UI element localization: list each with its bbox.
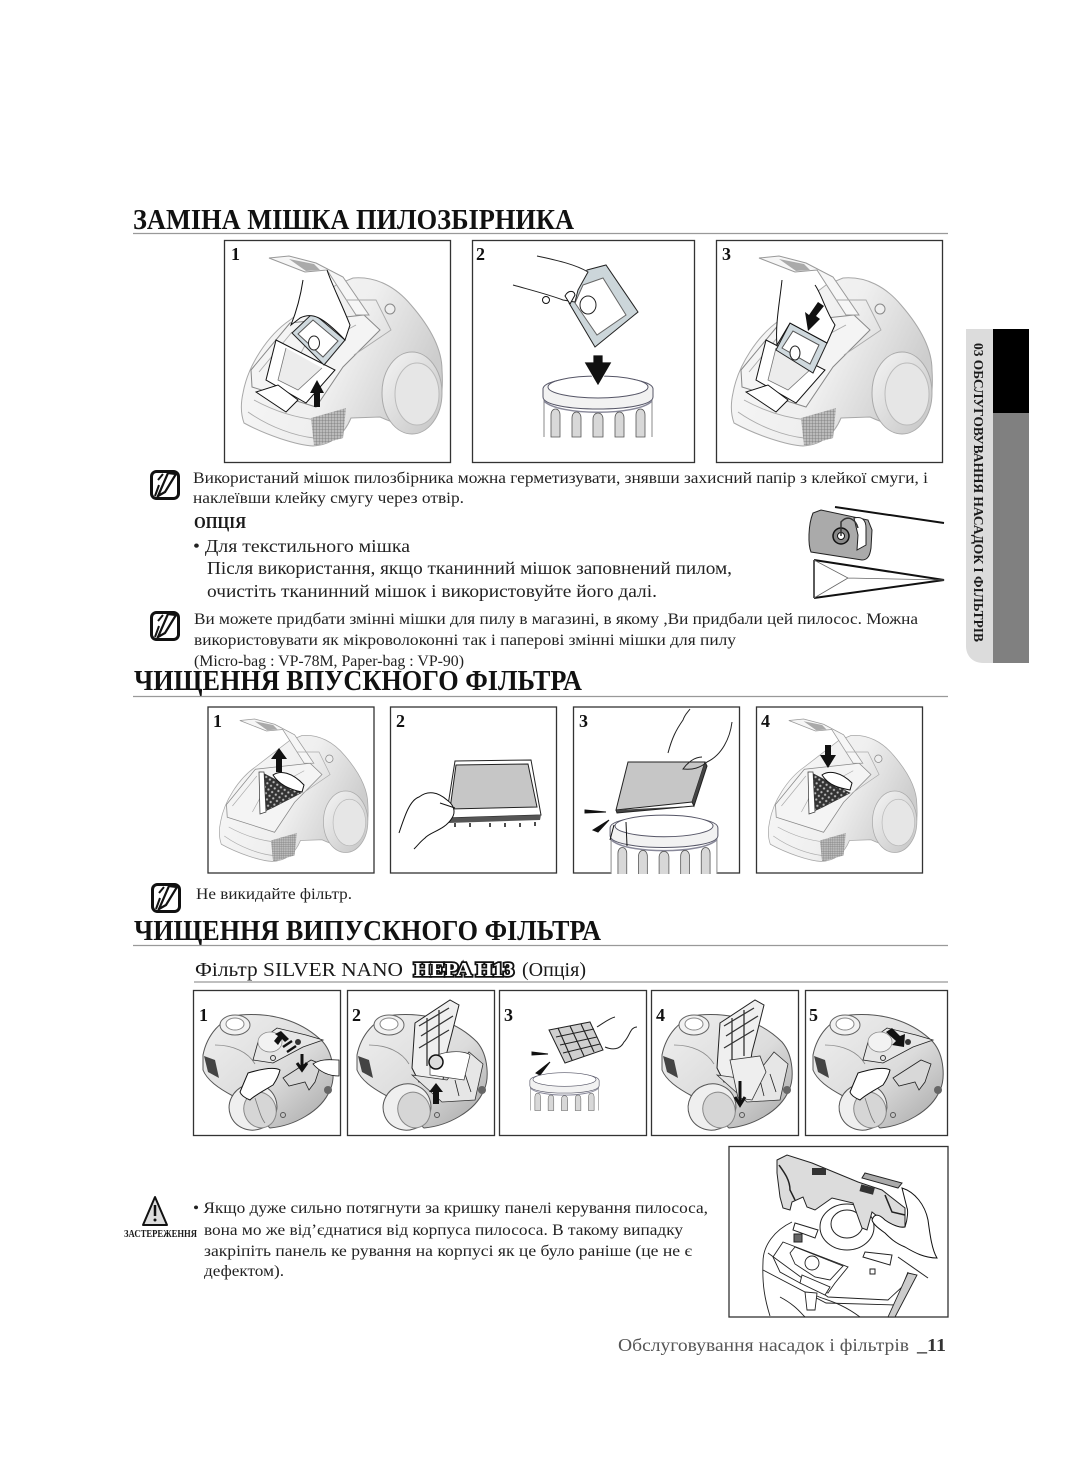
hand on cover xyxy=(872,1188,937,1258)
sidebar: chapter tab xyxy=(966,329,1029,663)
panel: outlet filter step 3 xyxy=(500,990,646,1136)
panel: outlet filter step 4: 4 xyxy=(656,1005,665,1025)
option block: • Для текстильного мішка xyxy=(193,536,410,556)
panel: inlet filter step 2: 2 xyxy=(396,711,405,731)
footer: page number: _11 xyxy=(916,1335,946,1355)
note: sealing the used bag: Використаний мішок пилозбірника можна герметизувати, знявши захисний папір з клейкої смуги, і xyxy=(193,470,929,487)
caution: control panel cover: вона мо же від’єднатися від корпуса пилососа. В такому випадку xyxy=(204,1222,683,1239)
grey cover xyxy=(777,1155,905,1230)
icon: textile bag xyxy=(809,507,944,598)
panel: inlet filter step 3 xyxy=(574,707,740,904)
heading: outlet filter cleaning: ЧИЩЕННЯ ВИПУСКНОГО ФІЛЬТРА xyxy=(134,916,602,947)
icon: note pencil xyxy=(152,472,178,498)
note: do not discard filter: Не викидайте фільтр. xyxy=(196,886,352,903)
note: do not discard filter xyxy=(152,884,352,912)
panel: outlet filter step 3: 3 xyxy=(504,1005,513,1025)
panel: outlet filter step 5 xyxy=(806,990,948,1137)
panel: inlet filter step 4 xyxy=(756,707,922,873)
heading: inlet filter cleaning: ЧИЩЕННЯ ВПУСКНОГО ФІЛЬТРА xyxy=(134,666,583,697)
sidebar: chapter tab: 03 ОБСЛУГОВУВАННЯ НАСАДОК І ФІЛЬТРІВ xyxy=(970,343,985,642)
subheading: silver nano filter: HEPA H13 xyxy=(414,959,514,981)
note: replacement bags: (Micro-bag : VP-78M, Paper-bag : VP-90) xyxy=(194,653,464,670)
subheading: silver nano filter xyxy=(194,959,948,982)
panel: outlet filter step 2: 2 xyxy=(352,1005,361,1025)
caution: control panel cover: ЗАСТЕРЕЖЕННЯ xyxy=(124,1228,197,1240)
note: sealing the used bag xyxy=(152,470,929,507)
panel: inlet filter step 2 xyxy=(390,707,556,873)
panel: bag step 2 xyxy=(472,240,694,462)
option block xyxy=(193,513,732,601)
panel: outlet filter step 5: 5 xyxy=(809,1005,818,1025)
option block: очистіть тканинний мішок і використовуйте його далі. xyxy=(207,581,657,601)
note: replacement bags xyxy=(152,611,918,670)
caution: control panel cover: закріпіть панель ке рування на корпусі як це було раніше (це не є xyxy=(204,1243,692,1260)
icon: warning triangle xyxy=(143,1197,167,1225)
note: replacement bags: Ви можете придбати змінні мішки для пилу в магазині, в якому ,Ви придбали цей пилосос. Можна xyxy=(194,611,918,628)
note: sealing the used bag: наклеївши клейку смугу через отвір. xyxy=(193,490,464,507)
heading: bag replacement: ЗАМІНА МІШКА ПИЛОЗБІРНИКА xyxy=(133,205,575,236)
panel: outlet filter step 2 xyxy=(348,990,494,1137)
option block: Після використання, якщо тканинний мішок заповнений пилом, xyxy=(207,558,732,578)
panel: bag step 3: 3 xyxy=(722,244,731,264)
panel: outlet filter step 4 xyxy=(652,990,798,1137)
panel: outlet filter step 1: 1 xyxy=(199,1005,208,1025)
subheading: silver nano filter: Фільтр SILVER NANO xyxy=(195,959,403,981)
caution: control panel cover xyxy=(124,1197,708,1280)
panel: outlet filter step 1 xyxy=(194,990,340,1137)
vacuum body outlines xyxy=(763,1222,917,1317)
note: replacement bags: використовувати як мікроволоконні так і паперові змінні мішки для пилу xyxy=(194,632,736,649)
panel: open control cover illustration xyxy=(729,1146,948,1317)
icon: note pencil xyxy=(152,612,178,640)
option block: ОПЦІЯ xyxy=(194,513,246,532)
caution: control panel cover: дефектом). xyxy=(204,1263,284,1280)
panel: inlet filter step 1 xyxy=(208,707,374,873)
panel: bag step 3 xyxy=(716,240,942,462)
panel: bag step 1 xyxy=(224,240,450,462)
footer: page number: Обслуговування насадок і фільтрів xyxy=(618,1335,909,1355)
subheading: silver nano filter: (Опція) xyxy=(522,959,586,981)
icon: note pencil xyxy=(152,884,180,912)
panel: bag step 2: 2 xyxy=(476,244,485,264)
caution: control panel cover: • Якщо дуже сильно потягнути за кришку панелі керування пилососа, xyxy=(193,1200,708,1217)
panel: inlet filter step 1: 1 xyxy=(213,711,222,731)
panel: bag step 1: 1 xyxy=(231,244,240,264)
panel: inlet filter step 4: 4 xyxy=(761,711,770,731)
panel: inlet filter step 3: 3 xyxy=(579,711,588,731)
